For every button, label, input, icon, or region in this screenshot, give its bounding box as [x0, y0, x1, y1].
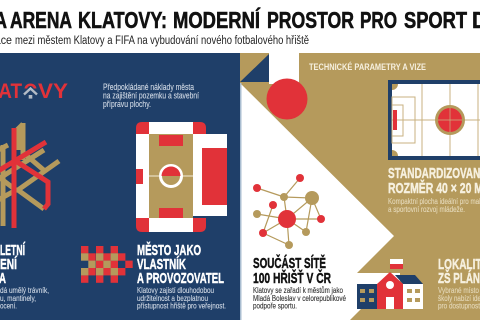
text: owner and operator: MĚSTO JAKO — [137, 241, 201, 259]
text: cost note: přípravu plochy. — [103, 99, 151, 109]
text: left column — [0, 242, 49, 310]
text: left column: dá umělý trávník, — [0, 285, 49, 295]
title: PRO — [360, 7, 397, 33]
text: network of 100 pitches: Mladá Boleslav v celorepublikové — [253, 293, 346, 303]
title: MODERNÍ — [173, 6, 261, 33]
icon: football pitch — [136, 122, 227, 232]
title — [0, 6, 480, 33]
panel: navy left — [0, 53, 240, 320]
logo: Klatovy — [0, 84, 68, 99]
icon: school — [357, 258, 423, 309]
title: ARENA — [10, 7, 72, 33]
heading: technical parameters: TECHNICKÉ PARAMETRY A VIZE — [309, 62, 426, 73]
red circle — [266, 78, 308, 120]
text: network of 100 pitches: podpoře sportu. — [253, 300, 297, 310]
text: owner and operator: Klatovy zajistí dlouhodobou — [137, 285, 214, 295]
text: owner and operator: udržitelnost a bezplatnou — [137, 293, 208, 303]
text: owner and operator: přístupnost hřiště pro veřejnost. — [137, 300, 226, 310]
icon: checker pattern — [81, 246, 133, 283]
text: left column: ENÍ — [0, 256, 18, 273]
text: left column: LETNÍ — [0, 242, 25, 259]
text: location — [438, 256, 480, 310]
subtitle: mezi městem Klatovy a FIFA na vybudování nového fotbalového hřiště — [15, 35, 309, 47]
text: standardized size — [388, 164, 480, 214]
chart: court diagram — [390, 82, 480, 158]
text: left column: u, mantinely, — [0, 293, 36, 303]
text: network of 100 pitches — [253, 254, 346, 310]
logo: Klatovy: O — [24, 79, 38, 103]
text: network of 100 pitches: SOUČÁST SÍTĚ — [253, 254, 326, 272]
text: owner and operator — [137, 241, 226, 310]
text: network of 100 pitches: Klatovy se zařadí k městům jako — [253, 285, 343, 295]
text: cost note: Předpokládané náklady města — [103, 82, 194, 92]
panel: white chevron — [240, 83, 400, 320]
text: owner and operator: A PROVOZOVATEL — [137, 270, 224, 287]
text: owner and operator: VLASTNÍK — [137, 256, 186, 273]
title: KLATOVY: — [78, 7, 167, 33]
icon: emblem — [0, 123, 59, 228]
text: left column: ocení. — [0, 300, 17, 310]
icon: network — [253, 174, 325, 249]
logo: Klatovy: VY — [38, 79, 68, 103]
title: PROSTOR — [267, 7, 354, 33]
panel: gold right — [240, 53, 480, 320]
text: cost note: na zajištění pozemku a stavební — [103, 90, 199, 100]
text: network of 100 pitches: 100 HŘIŠŤ V ČR — [253, 269, 331, 287]
text: cost note — [103, 82, 199, 109]
navy triangle — [240, 54, 269, 82]
white block — [269, 53, 299, 84]
